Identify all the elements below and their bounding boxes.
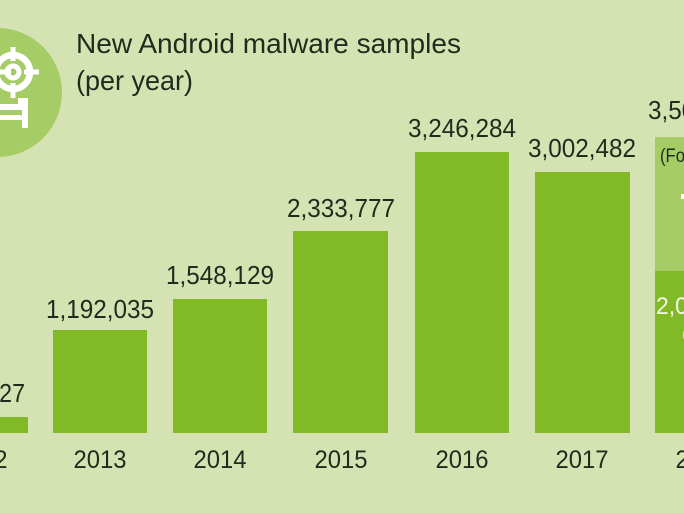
value: 2016: 3,246,284 (408, 113, 516, 143)
year: 2017: 2017 (556, 446, 608, 474)
year: 2013: 2013 (74, 446, 126, 474)
bar: 2016 (415, 152, 509, 433)
year: 2014: 2014 (194, 446, 247, 474)
icon: malware target badge (0, 28, 62, 157)
bar: 2017 (535, 172, 630, 433)
bar: 2018 forecast portion (655, 137, 684, 271)
bar: 2018 actual portion (655, 271, 684, 433)
bar: 2014 (173, 299, 267, 433)
value: 2015: 2,333,777 (287, 193, 395, 223)
title (76, 28, 461, 96)
mark inside forecast segment (681, 194, 684, 199)
bar: 2015 (293, 231, 388, 433)
bar chart: malware samples per year (0, 137, 684, 433)
title: New Android malware samples (76, 28, 461, 59)
year: 2015: 2015 (314, 446, 368, 474)
year axis labels (0, 446, 684, 474)
value: 2014: 1,548,129 (166, 260, 274, 290)
title: (per year) (76, 65, 193, 96)
bar: 2013 (53, 330, 147, 433)
value: 2013: 1,192,035 (46, 294, 154, 324)
value: 2017: 3,002,482 (528, 133, 636, 163)
value labels (0, 95, 684, 408)
year: 2016: 2016 (436, 446, 488, 474)
bar: 2012 (0, 417, 28, 433)
